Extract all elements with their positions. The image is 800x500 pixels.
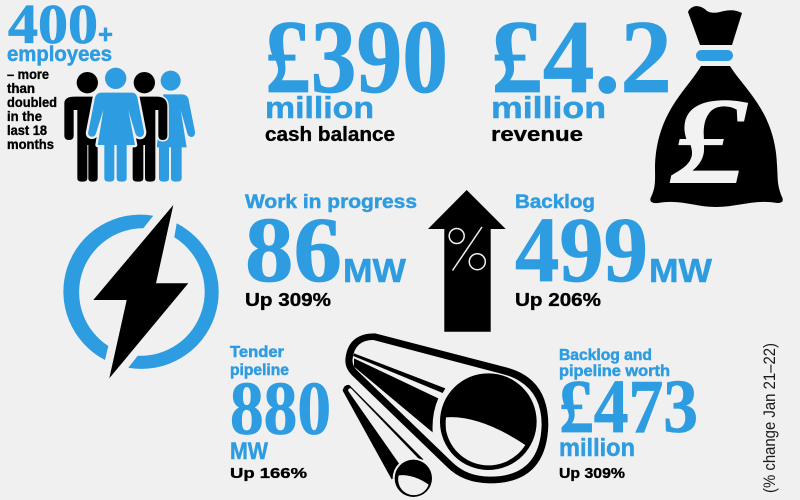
employees stat: than — [7, 80, 35, 96]
stat: work in progress: Work in progress — [245, 191, 417, 213]
stat: tender pipeline: Up 166% — [230, 465, 307, 482]
stat: backlog and pipeline worth — [559, 347, 698, 482]
icon: group of people — [64, 68, 195, 182]
stat: work in progress: Up 309% — [245, 290, 331, 310]
stat: work in progress — [245, 191, 417, 310]
stat: backlog: Up 206% — [515, 290, 601, 310]
employees stat: – more — [7, 66, 49, 82]
footnote: percent change period: (% change Jan 21–22) — [760, 343, 779, 493]
stat: tender pipeline: 880 — [230, 367, 331, 451]
icon: money bag — [650, 6, 783, 211]
stat: backlog and pipeline worth: Up 309% — [559, 465, 625, 482]
stat: backlog and pipeline worth: million — [559, 434, 635, 462]
employees stat — [7, 0, 113, 152]
stat: tender pipeline — [230, 344, 331, 482]
stat: cash balance: cash balance — [265, 124, 395, 146]
employees stat: in the — [7, 108, 42, 124]
employees stat: + — [98, 19, 113, 49]
stat: cash balance: £390 — [265, 0, 448, 115]
stat: work in progress: 86 — [245, 199, 342, 302]
stat: revenue: £4.2 — [491, 0, 672, 115]
stat: work in progress: MW — [343, 252, 407, 289]
employees stat: last 18 — [7, 122, 47, 138]
stat: revenue: revenue — [491, 124, 583, 146]
stat: tender pipeline: Tender — [230, 344, 284, 361]
employees stat: months — [7, 136, 54, 152]
stat: cash balance: million — [265, 90, 374, 125]
icon: money bag: £ — [669, 73, 749, 211]
stat: backlog: MW — [649, 252, 713, 289]
icon: lightning bolt in ring — [63, 205, 219, 378]
stat: backlog: 499 — [515, 199, 648, 302]
stat: backlog and pipeline worth: pipeline worth — [559, 363, 670, 380]
employees stat: employees — [7, 43, 112, 66]
icon: pipes — [343, 333, 548, 499]
stat: tender pipeline: pipeline — [230, 362, 289, 379]
employees stat: doubled — [7, 94, 57, 110]
stat: backlog — [515, 191, 713, 310]
stat: tender pipeline: MW — [230, 438, 268, 465]
stat: backlog and pipeline worth: £473 — [559, 365, 698, 449]
stat: backlog and pipeline worth: Backlog and — [559, 347, 652, 364]
icon: up arrow with percent — [428, 190, 506, 332]
stat: backlog: Backlog — [515, 191, 595, 213]
stat: revenue: million — [491, 90, 606, 125]
